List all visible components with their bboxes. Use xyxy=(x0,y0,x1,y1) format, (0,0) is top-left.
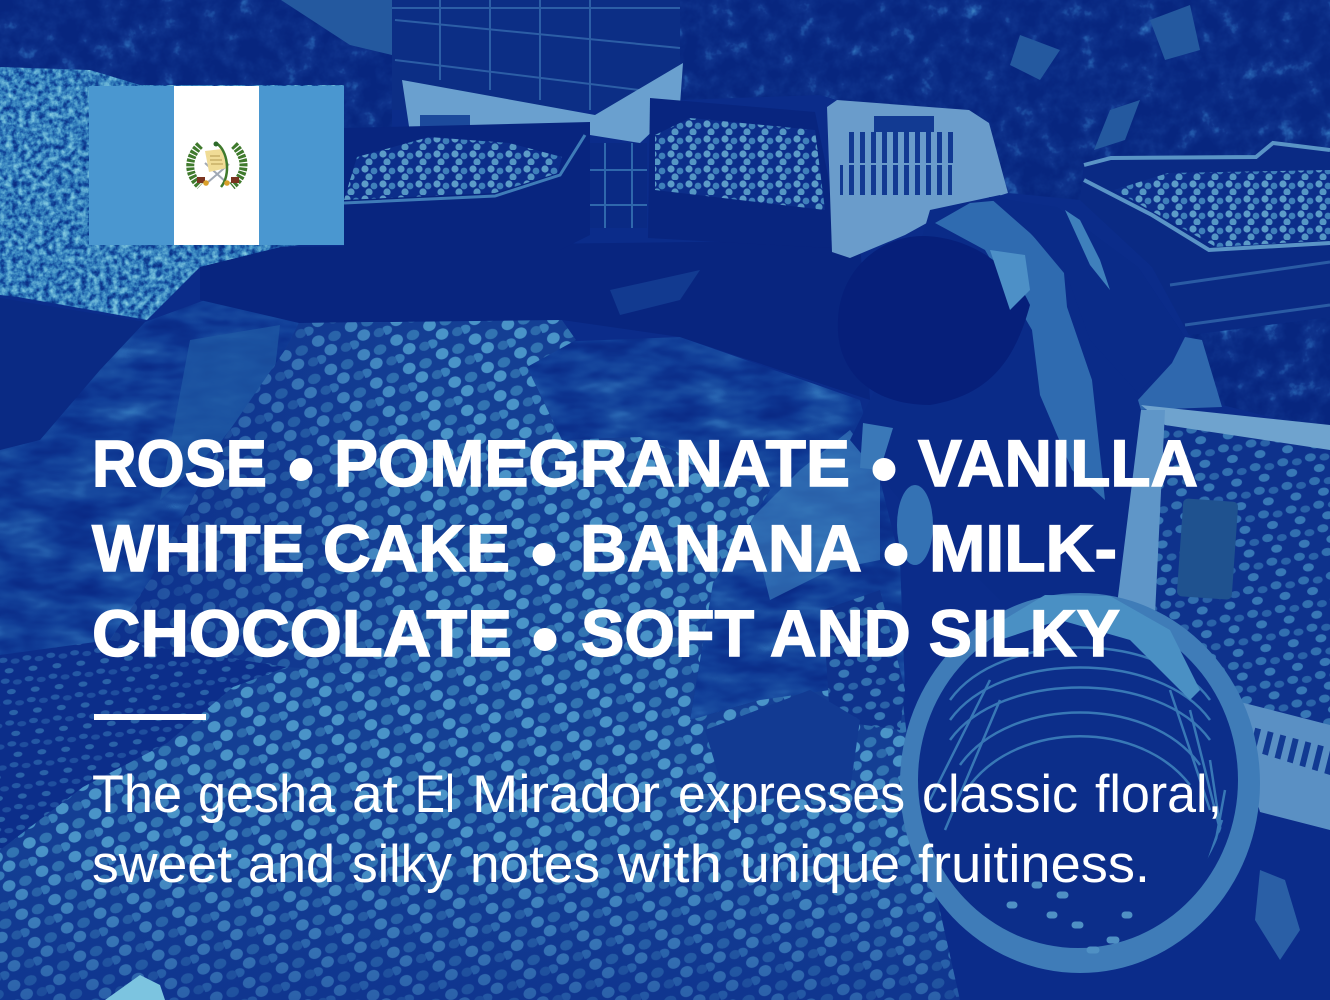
hair xyxy=(838,236,1030,405)
stacked dark crate at top xyxy=(392,0,683,228)
bean crate, right xyxy=(1080,143,1330,335)
dim tarp fold below text xyxy=(705,690,860,800)
dark vest xyxy=(989,197,1182,393)
icon: coat of arms xyxy=(190,142,244,187)
heading: tasting notes: CHOCOLATE xyxy=(92,596,512,670)
light slotted crate xyxy=(827,100,1008,258)
plastic sheet near the top xyxy=(281,0,392,55)
heading: tasting notes: ROSE xyxy=(92,426,267,500)
forearm xyxy=(860,423,893,470)
description text: The xyxy=(92,765,182,824)
heading: tasting notes: • xyxy=(530,509,558,598)
description text: Mirador xyxy=(472,765,660,824)
fold highlight near crate base xyxy=(610,270,700,315)
divider rule xyxy=(94,714,206,720)
description text: silky xyxy=(352,835,452,894)
shaded left flank of bean pile xyxy=(110,323,430,680)
description text: notes xyxy=(470,835,600,894)
description text: at xyxy=(352,765,398,824)
woven basket xyxy=(900,593,1260,973)
knee xyxy=(897,485,933,565)
heading: tasting notes: SOFT AND SILKY xyxy=(581,596,1120,670)
pale gravel ground xyxy=(0,67,344,320)
description text: gesha xyxy=(198,765,335,824)
bean crate, centre xyxy=(648,98,835,248)
basket weave slats xyxy=(929,646,1226,858)
vest lettering strip xyxy=(1065,210,1110,290)
dark beans at left xyxy=(0,640,287,850)
shaded foot of bean pile xyxy=(0,850,960,1000)
very dark tarp under crates xyxy=(200,240,870,400)
bright fold on tarp xyxy=(750,430,880,600)
small bean cluster by the tarp xyxy=(823,590,905,730)
heading: tasting notes: • xyxy=(870,424,898,513)
heading: tasting notes: MILK- xyxy=(929,511,1117,585)
pale spot at bottom edge xyxy=(105,975,165,1000)
shirt tail xyxy=(1138,337,1222,410)
beans inside basket xyxy=(1010,885,1129,950)
description text: unique xyxy=(740,835,900,894)
bean crate, left xyxy=(344,122,590,250)
heading: tasting notes xyxy=(92,424,1198,683)
tarp fold strip xyxy=(160,325,280,500)
cloth on the rim xyxy=(995,595,1200,700)
description text: classic xyxy=(922,765,1078,824)
bright bean pile xyxy=(0,320,960,1000)
description text: floral, xyxy=(1095,765,1222,824)
neck xyxy=(990,250,1030,310)
description text xyxy=(92,765,1222,894)
worker xyxy=(838,195,1222,600)
description text: sweet xyxy=(92,835,232,894)
leaf highlights xyxy=(1010,5,1200,150)
soil at right xyxy=(1190,317,1330,432)
tarp under worker with highlights xyxy=(527,337,905,720)
heading: tasting notes: • xyxy=(531,594,559,683)
flag of Guatemala xyxy=(89,86,344,245)
shirt sleeve xyxy=(935,200,1105,500)
heading: tasting notes: • xyxy=(287,424,315,513)
heading: tasting notes: BANANA xyxy=(580,511,862,585)
description text: fruitiness. xyxy=(918,835,1150,894)
left tarp xyxy=(0,300,300,655)
description text: El xyxy=(415,765,455,824)
description text: and xyxy=(248,835,335,894)
heading: tasting notes: • xyxy=(882,509,910,598)
debris at upper left xyxy=(0,0,392,130)
heading: tasting notes: POMEGRANATE xyxy=(334,426,850,500)
dark body base xyxy=(850,195,1222,600)
heading: tasting notes: VANILLA xyxy=(918,426,1198,500)
dark soil xyxy=(0,298,145,450)
description text: with xyxy=(617,835,722,894)
foliage at upper right xyxy=(680,0,1330,200)
bean crate, lower right xyxy=(1117,405,1330,830)
leaves at lower right xyxy=(1255,870,1300,960)
heading: tasting notes: WHITE CAKE xyxy=(92,511,510,585)
description text: expresses xyxy=(678,765,905,824)
